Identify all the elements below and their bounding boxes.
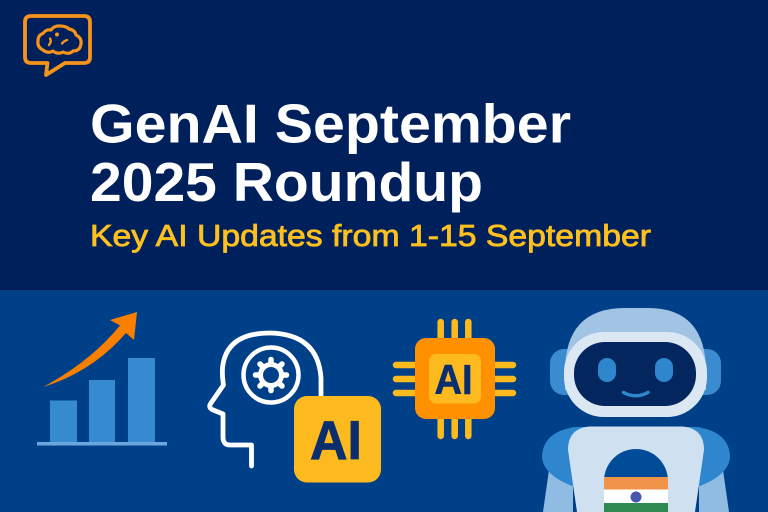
robot ears — [550, 349, 590, 395]
robot dome — [565, 308, 706, 390]
robot shoulders — [542, 427, 730, 486]
subtitle: Key AI Updates from 1-15 September — [90, 218, 651, 253]
title line 2: 2025 Roundup — [90, 151, 483, 213]
robot visor — [574, 342, 696, 406]
bottom panel background — [0, 290, 768, 512]
header panel background — [0, 0, 768, 290]
icon: friendly robot with India flag — [542, 308, 730, 512]
logo icon: brain speech bubble — [25, 16, 90, 75]
robot smile — [624, 392, 648, 396]
robot arms — [543, 470, 729, 512]
robot eyes — [598, 358, 616, 382]
AI badge: AI — [310, 409, 362, 471]
robot face ring — [564, 332, 707, 417]
icon: AI chip — [396, 322, 513, 436]
icon: head with gear and AI badge — [210, 333, 381, 482]
robot chest flag — [604, 449, 668, 512]
AI badge — [294, 396, 381, 482]
icon: AI chip: AI — [434, 356, 472, 403]
icon: growth bar chart with arrow — [37, 312, 167, 446]
robot torso — [568, 426, 704, 512]
title: GenAI September — [90, 92, 571, 154]
